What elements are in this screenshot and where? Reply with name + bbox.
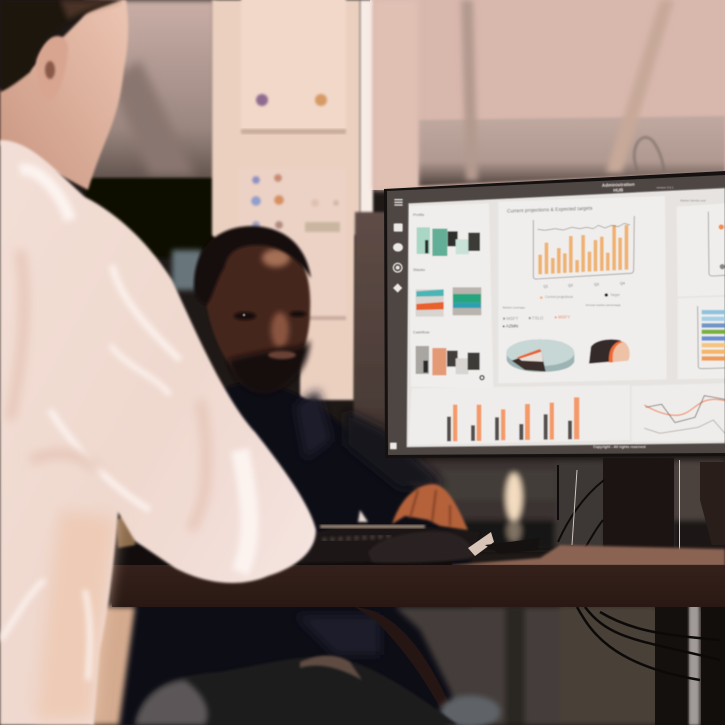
woman in white shirt [0,0,316,725]
panel: stacks list [409,203,493,388]
desk [112,545,725,607]
dark opening [85,178,215,258]
asset tickers: ■ MSFT [503,316,519,321]
asset tickers [502,314,570,329]
man's legs [135,657,458,725]
hair [0,0,122,92]
cashflow cylinders [416,346,480,375]
panel: stacks list: Stacks [413,267,425,272]
header title [602,182,674,193]
main monitor [384,171,725,458]
face [205,237,310,388]
axis labels: Q3 [594,283,599,287]
rear monitor [353,212,387,470]
shirt [0,140,316,725]
axis labels: Q1 [543,284,548,288]
shirt lower torso warm tone [35,510,116,720]
man's hand [392,484,468,530]
asset tickers: ● AZMN [502,324,518,329]
under-desk background [90,605,725,725]
3d half cylinder [589,339,630,364]
panel: current projections [498,196,667,383]
axis labels: Q4 [620,282,625,286]
screen background [407,188,725,447]
shirt folds [10,250,207,530]
panel: line chart [632,383,725,442]
torso [118,383,470,725]
beard [228,340,310,394]
screen content [390,182,725,449]
bezel [384,171,725,458]
desk top left dark surface [112,545,452,566]
header title: HUB [613,187,624,193]
panel: risk quadrant [677,199,725,297]
chart frame [533,216,634,279]
panel: stacks list: Profits [413,212,424,217]
legend [540,293,620,299]
man in dark shirt [118,226,470,725]
panel: risk quadrant: Market Identity and [680,199,706,203]
desk top right [440,545,725,566]
target line [538,223,630,230]
orange bars [538,225,628,274]
desk front [112,565,725,607]
panel: current projections: Market coverage [503,306,525,310]
ceiling right [370,0,725,190]
wall planner with stickers [238,168,346,320]
chair back [355,607,450,708]
sidebar icons [390,199,403,449]
computer mouse [368,532,540,563]
hair [194,226,311,305]
ceiling left [85,0,215,182]
ear [36,36,68,102]
wall note with dots [241,0,346,134]
footer copyright: Copyright - All rights reserved [593,445,646,449]
axis labels: Q2 [568,284,573,288]
legend: Target [610,293,620,297]
axis labels [543,282,625,288]
shirt highlights [0,170,249,680]
panel: current projections: Current projections & Expected targets [507,206,593,215]
panel: bottom bar chart [408,385,630,445]
monitor stand [558,458,725,550]
background right below monitor [385,460,725,550]
asset tickers: ■ TSLO [528,315,544,320]
panel: horizontal bars [678,297,725,379]
legend: Current projections [545,295,573,299]
header title: Administration [602,182,635,188]
panel: stacks list: Cashflow [413,329,430,334]
white column with wall notes [212,0,418,400]
panel: current projections: Annual market percentage [586,303,621,307]
desk legs and cables [577,605,725,725]
gold desk ornament [116,510,135,548]
profits cylinders [417,227,480,256]
3d pie chart [506,339,574,372]
asset tickers: ● MSFY [554,314,570,319]
keyboard [116,510,480,563]
header title: version 3.0.1 [656,185,674,189]
neck and face [0,0,128,190]
stacks blocks [416,287,481,317]
